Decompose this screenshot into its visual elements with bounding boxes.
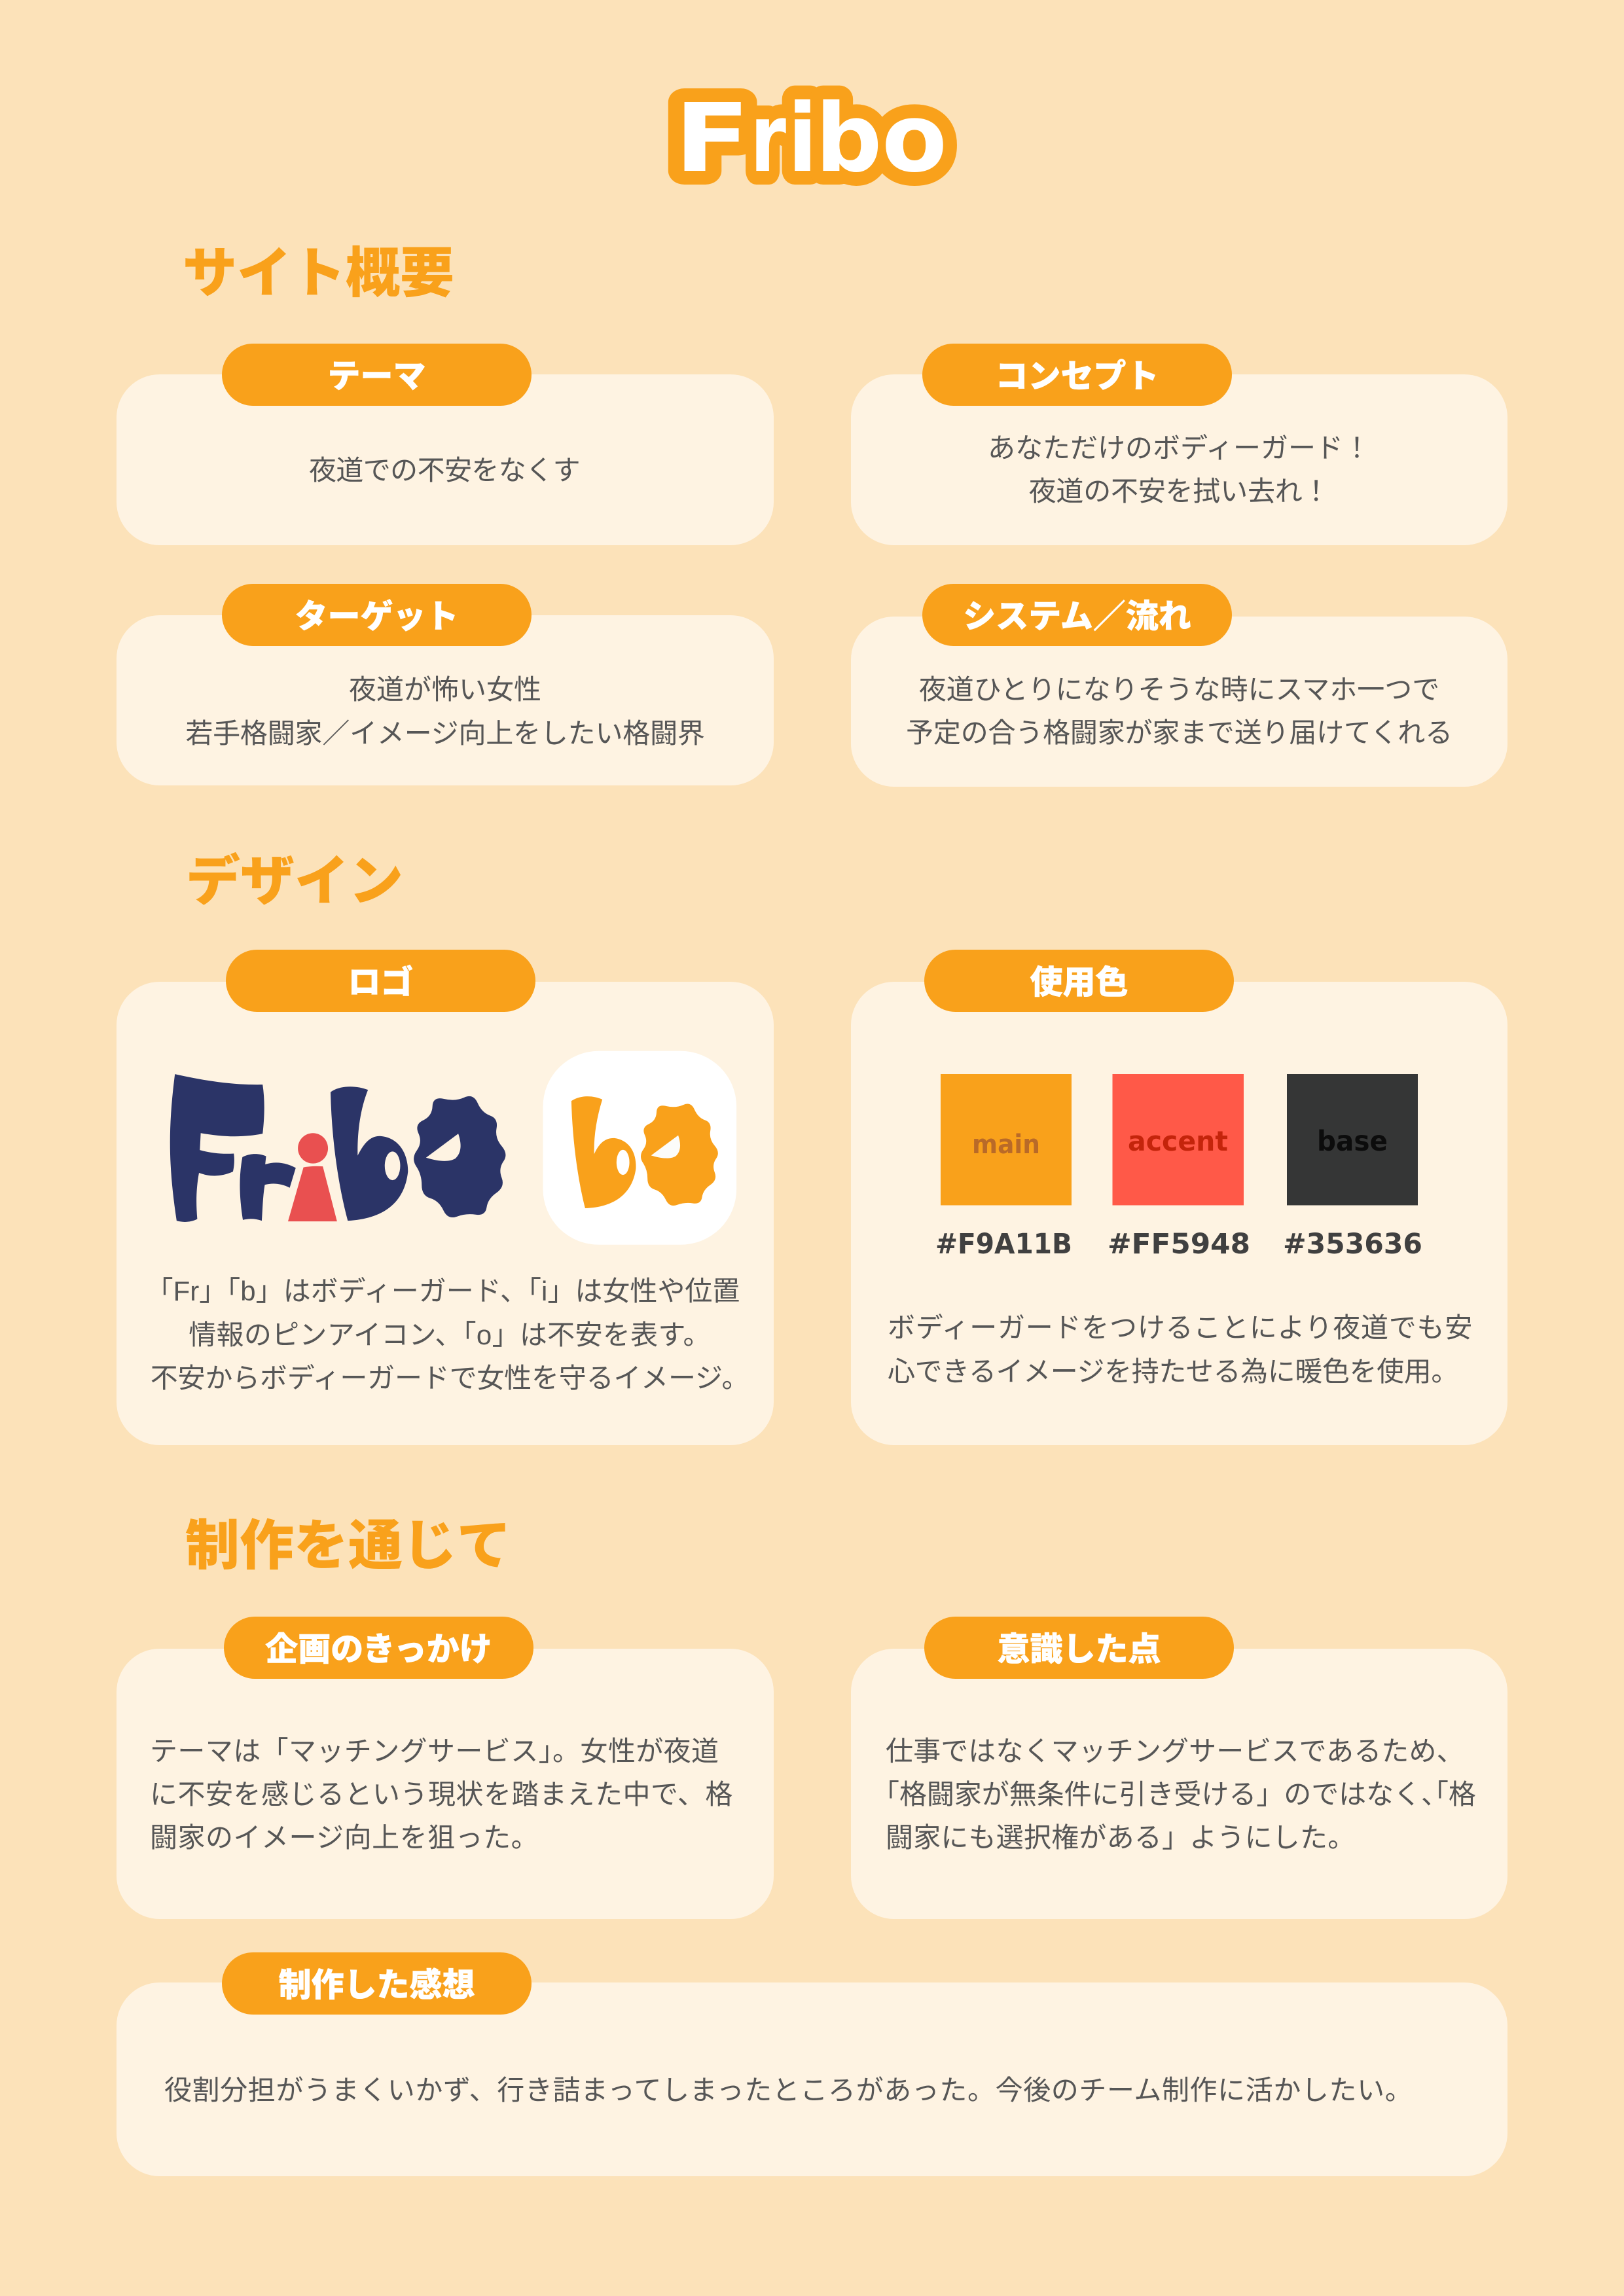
- heading: 制作を通じて: 制作を通じて: [185, 1515, 511, 1576]
- text: 企画のきっかけ body: [150, 1736, 733, 1853]
- title: Fribo wordmark: F: [674, 83, 750, 193]
- title: Fribo wordmark: F: [674, 83, 750, 193]
- panel background: [851, 374, 1507, 545]
- pill label: システム／流れ: [922, 584, 1232, 646]
- text: 意識した点 body: [886, 1736, 1476, 1853]
- text: 意識した点 body: 「格闘家が無条件に引き受ける」のではなく、「格: [886, 1779, 1476, 1810]
- title: Fribo wordmark: i: [787, 83, 818, 193]
- panel: 企画のきっかけ: [117, 1617, 774, 1919]
- text: 使用色 description: 心できるイメージを持たせる為に暖色を使用。: [888, 1356, 1458, 1387]
- panel: テーマ: [117, 344, 774, 545]
- panel: ロゴ: [117, 950, 774, 1445]
- title: Fribo wordmark: b: [816, 83, 882, 193]
- icon: app icon bo: [543, 1051, 736, 1245]
- text: コンセプト body: [988, 433, 1371, 507]
- panel background: [117, 1649, 774, 1919]
- text: ロゴ description: 「Fr」「b」はボディーガード、「i」は女性や位置: [160, 1276, 740, 1306]
- pill label: ロゴ: ロゴ: [348, 964, 414, 1001]
- text: 意識した点 body: 闘家にも選択権がある」ようにした。: [886, 1822, 1355, 1853]
- logo: Fribo wordmark: [170, 1074, 505, 1222]
- title: Fribo wordmark: r: [750, 83, 786, 193]
- text: ターゲット body: [185, 674, 705, 749]
- title: Fribo wordmark: [668, 83, 957, 193]
- title: Fribo wordmark: o: [882, 83, 947, 193]
- pill label: システム／流れ: システム／流れ: [963, 598, 1191, 635]
- title: Fribo wordmark: r: [750, 83, 786, 193]
- pill label: 制作した感想: [222, 1952, 532, 2015]
- text: ロゴ description: [151, 1276, 749, 1393]
- pill label: 使用色: 使用色: [1030, 964, 1128, 1001]
- text: 企画のきっかけ body: に不安を感じるという現状を踏まえた中で、格: [150, 1779, 733, 1810]
- text: システム body: 夜道ひとりになりそうな時にスマホ一つで: [919, 674, 1439, 705]
- pill label: ターゲット: ターゲット: [295, 598, 458, 635]
- pill label: コンセプト: [922, 344, 1232, 406]
- heading: サイト概要: サイト概要: [183, 243, 454, 304]
- text: コンセプト body: 夜道の不安を拭い去れ！: [1029, 476, 1329, 507]
- text: システム body: 予定の合う格闘家が家まで送り届けてくれる: [906, 717, 1453, 748]
- text: ロゴ description: 不安からボディーガードで女性を守るイメージ。: [151, 1363, 749, 1393]
- swatch: main: #F9A11B: [935, 1228, 1072, 1261]
- panel: 制作した感想: [117, 1952, 1507, 2176]
- swatch: accent: #FF5948: [1108, 1228, 1250, 1261]
- pill label: ロゴ: [226, 950, 535, 1012]
- title: Fribo wordmark: b: [816, 83, 882, 193]
- heading: デザイン: デザイン: [186, 851, 403, 912]
- panel: システム／流れ: [851, 584, 1507, 787]
- pill label: テーマ: [222, 344, 532, 406]
- text: ロゴ description: 情報のピンアイコン、「o」は不安を表す。: [189, 1319, 711, 1350]
- swatch: main: [935, 1074, 1072, 1261]
- swatch: accent: [1108, 1074, 1250, 1261]
- swatch: base: base: [1317, 1125, 1388, 1158]
- text: ターゲット body: 夜道が怖い女性: [349, 674, 541, 705]
- panel background: [851, 1649, 1507, 1919]
- text: 使用色 description: [888, 1312, 1473, 1387]
- text: 意識した点 body: 仕事ではなくマッチングサービスであるため、: [886, 1736, 1464, 1767]
- swatch: main: main: [972, 1130, 1040, 1160]
- pill label: コンセプト: コンセプト: [995, 358, 1159, 395]
- panel background: [117, 615, 774, 785]
- text: 企画のきっかけ body: テーマは「マッチングサービス」。女性が夜道: [150, 1736, 719, 1767]
- panel: コンセプト: [851, 344, 1507, 545]
- swatch: base: [1283, 1074, 1422, 1261]
- panel background: [117, 1982, 1507, 2176]
- panel background: [851, 982, 1507, 1445]
- title: Fribo wordmark: i: [787, 83, 818, 193]
- pill label: 意識した点: [924, 1617, 1234, 1679]
- panel background: [851, 617, 1507, 787]
- swatch: base: #353636: [1283, 1228, 1422, 1261]
- pill label: テーマ: テーマ: [327, 358, 425, 395]
- text: 使用色 description: ボディーガードをつけることにより夜道でも安: [888, 1312, 1473, 1343]
- title: Fribo wordmark: o: [882, 83, 947, 193]
- pill label: 企画のきっかけ: 企画のきっかけ: [265, 1631, 492, 1668]
- pill label: 制作した感想: 制作した感想: [279, 1967, 475, 2003]
- text: テーマ body: 夜道での不安をなくす: [309, 455, 580, 486]
- pill label: 企画のきっかけ: [224, 1617, 533, 1679]
- text: ターゲット body: 若手格闘家／イメージ向上をしたい格闘界: [185, 718, 705, 749]
- pill label: 使用色: [924, 950, 1234, 1012]
- text: コンセプト body: あなただけのボディーガード！: [988, 433, 1371, 463]
- panel: ターゲット: [117, 584, 774, 785]
- text: 制作した感想 body: 役割分担がうまくいかず、行き詰まってしまったところがあった。今後のチーム制作に活かしたい。: [164, 2075, 1413, 2106]
- panel: 意識した点: [851, 1617, 1507, 1919]
- logos: [170, 1051, 736, 1245]
- text: 企画のきっかけ body: 闘家のイメージ向上を狙った。: [150, 1822, 539, 1853]
- colour swatches: [935, 1074, 1422, 1261]
- panel: 使用色: [851, 950, 1507, 1445]
- pill label: 意識した点: 意識した点: [998, 1631, 1161, 1668]
- swatch: accent: accent: [1128, 1125, 1228, 1157]
- panel background: [117, 982, 774, 1445]
- text: システム body: [906, 674, 1453, 748]
- pill label: ターゲット: [222, 584, 532, 646]
- panel background: [117, 374, 774, 545]
